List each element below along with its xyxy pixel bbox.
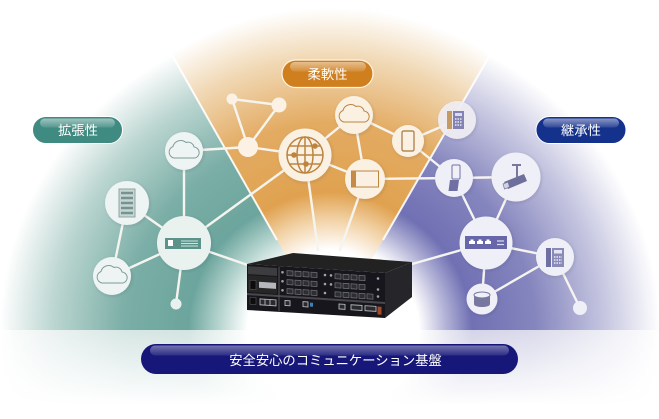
small end node bbox=[170, 298, 182, 310]
small node right bbox=[272, 98, 286, 112]
orange network nodes bbox=[226, 94, 476, 199]
banner: 安全安心のコミュニケーション基盤 bbox=[141, 344, 518, 374]
wedge: purple continuity area bbox=[376, 63, 652, 330]
small node left bbox=[226, 94, 238, 104]
pill label: 柔軟性 bbox=[282, 60, 373, 88]
pill label: 継承性 bbox=[536, 116, 626, 144]
icon: desk phone node bbox=[536, 238, 574, 276]
wedge: orange flexibility area bbox=[175, 14, 486, 259]
icon: wide device node bbox=[345, 159, 385, 199]
pill label: 拡張性 bbox=[32, 116, 122, 144]
pill label: 継承性: 継承性 bbox=[561, 123, 601, 138]
pill label: 柔軟性: 柔軟性 bbox=[308, 67, 347, 82]
icon: database node bbox=[466, 284, 498, 314]
network connection lines bbox=[112, 99, 580, 308]
purple network nodes bbox=[435, 152, 587, 315]
icon: flip phone node bbox=[435, 159, 473, 197]
icon: cloud node bbox=[335, 96, 373, 134]
icon: server rack node bbox=[105, 181, 149, 225]
icon: globe node bbox=[278, 128, 332, 182]
small end node bbox=[573, 301, 587, 315]
banner: 安全安心のコミュニケーション基盤: 安全安心のコミュニケーション基盤 bbox=[229, 353, 442, 368]
icon: cloud node bottom bbox=[93, 257, 131, 295]
icon: cloud node top bbox=[165, 132, 203, 170]
icon: security camera node bbox=[492, 152, 540, 202]
icon: switch hub node bbox=[157, 216, 211, 270]
icon: office phone node bbox=[438, 101, 476, 139]
icon: network hub node bbox=[460, 216, 512, 270]
icon: smartphone node bbox=[392, 125, 424, 157]
product: communication server hardware bbox=[247, 253, 412, 318]
green network nodes bbox=[93, 132, 211, 310]
wedge: green expandability area bbox=[6, 61, 286, 330]
small relay node bbox=[238, 137, 258, 157]
pill label: 拡張性: 拡張性 bbox=[58, 123, 98, 138]
